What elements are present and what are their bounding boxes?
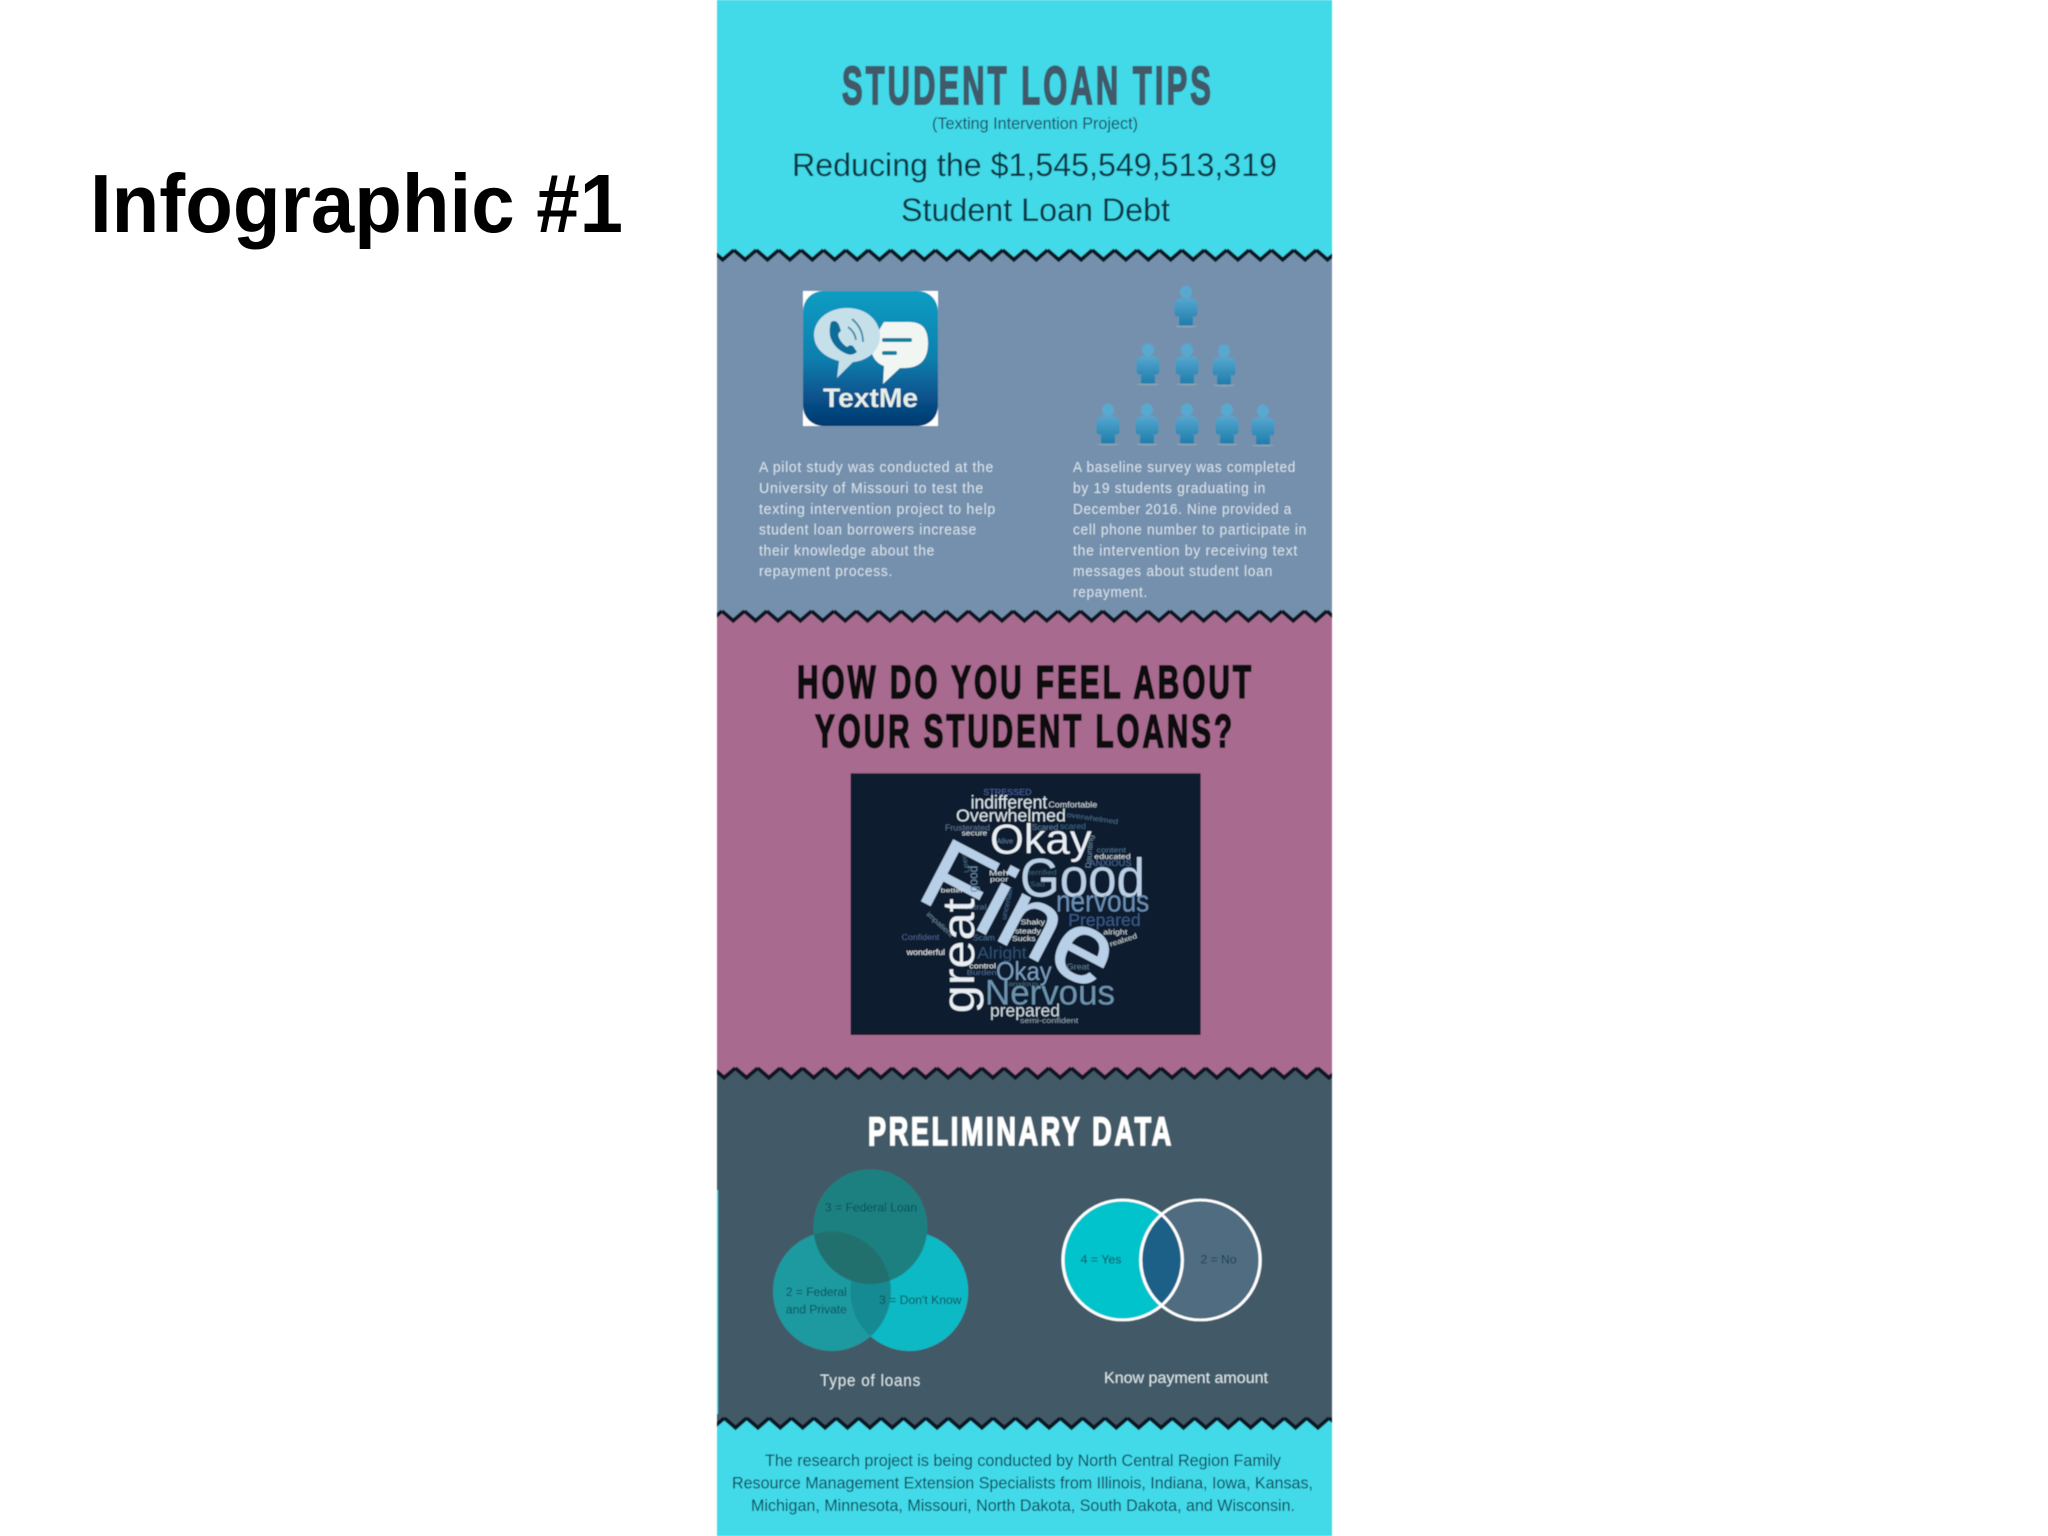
word cloud: Alright [977,943,1027,962]
word cloud: better [941,887,964,894]
word cloud: Daunting [1084,835,1096,868]
text: pilot study description: texting intervention project to help [759,501,996,518]
word cloud: poor [990,877,1009,884]
panel: title header [717,0,1332,252]
word cloud: overwhelmed [1066,810,1119,826]
text: baseline survey description: December 2016. Nine provided a [1073,501,1292,518]
word cloud: secure [962,829,987,838]
subtitle: Texting Intervention Project: (Texting Intervention Project) [932,114,1138,133]
text: baseline survey description: the intervention by receiving text [1073,542,1298,560]
venn labels [1081,1252,1237,1266]
headline: debt amount [792,147,1277,228]
text: pilot study description: their knowledge about the [759,542,935,560]
word cloud [851,773,1201,1035]
text: research project note: Resource Management Extension Specialists from Illinois, Indiana, Iowa, Kansas, [732,1474,1313,1492]
text: research project note [732,1452,1313,1515]
text: baseline survey description: repayment. [1073,584,1148,601]
chart: type of loans venn diagram [773,1169,968,1351]
word cloud: content [1097,845,1126,854]
text: baseline survey description: A baseline survey was completed [1073,459,1296,476]
word cloud: ANXIOUS [1089,859,1132,868]
venn labels: and Private [786,1302,847,1316]
word cloud: Frusterated [945,823,990,832]
slide heading: Infographic #1: Infographic #1 [90,157,623,250]
heading: How do you feel: HOW DO YOU FEEL ABOUT [797,656,1254,708]
word cloud: STRESSED [983,788,1032,797]
word cloud: Alive [997,836,1013,845]
headline: debt amount: Student Loan Debt [901,192,1170,228]
venn labels: 2 = Federal [786,1285,847,1299]
text: pilot study description: repayment process. [759,563,893,580]
word cloud: Nervous [985,973,1115,1012]
icon: group of people [1096,286,1274,446]
word cloud: Okay [990,815,1092,862]
word cloud: great [933,898,984,1013]
word cloud: uncertain [999,886,1015,920]
heading: Preliminary Data: PRELIMINARY DATA [868,1110,1174,1154]
word cloud: Overwhelmed [956,806,1066,826]
text: pilot study description: A pilot study was conducted at the [759,459,994,476]
word cloud: control [969,961,996,970]
text: pilot study description: University of Missouri to test the [759,480,984,497]
text: baseline survey description [1073,459,1307,601]
word cloud: Shaky [1021,917,1045,926]
word cloud: realxed [1108,931,1138,949]
word cloud: Leery [959,850,971,874]
word cloud: indifferent [971,791,1048,812]
icon: TextMe app: TextMe [823,383,918,413]
venn labels: 3 = Don't Know [879,1293,962,1307]
word cloud: Prepared [1068,910,1141,930]
panel: preliminary data [717,1070,1332,1422]
word cloud: prepared [990,1001,1060,1021]
word cloud: steady [1015,927,1041,936]
title: Student Loan Tips: STUDENT LOAN TIPS [842,56,1214,116]
label: type of loans: Type of loans [820,1371,921,1390]
infographic poster [717,0,1332,1536]
word cloud: educated [1094,852,1131,861]
venn labels [786,1201,962,1316]
word cloud: Meh [989,869,1008,878]
word cloud: Sucks [1012,934,1036,943]
word cloud: Fine [904,817,1137,1011]
label: know payment amount: Know payment amount [1104,1370,1269,1387]
word cloud: Okay [996,956,1052,986]
word cloud: nervous [1056,885,1149,919]
headline: debt amount: Reducing the $1,545,549,513,319 [792,147,1277,183]
venn labels: 2 = No [1200,1252,1237,1266]
venn labels: 3 = Federal Loan [825,1201,917,1214]
word cloud: alright [1103,927,1127,936]
word cloud: Burden [967,968,997,977]
text: research project note: Michigan, Minnesota, Missouri, North Dakota, South Dakota, and Wisconsin. [751,1497,1295,1515]
word cloud: Comfortable [1048,800,1098,809]
venn labels: 4 = Yes [1081,1252,1122,1266]
word cloud: semi-confident [1020,1016,1078,1025]
text: research project note: The research project is being conducted by North Central Region Family [765,1452,1282,1470]
word cloud: good [965,866,980,892]
word cloud: scared [1060,822,1086,831]
icon: TextMe app [803,291,938,426]
panel: feelings about student loans [717,614,1332,1070]
word cloud: wonderful [906,948,945,957]
text: pilot study description: student loan borrowers increase [759,522,977,538]
word cloud: Great [1067,963,1090,972]
word cloud: neutral [958,902,987,911]
panel: pilot study [717,252,1332,614]
heading: How do you feel: YOUR STUDENT LOANS? [815,705,1235,757]
text: baseline survey description: by 19 students graduating in [1073,480,1266,497]
word cloud: terrified [1028,868,1057,877]
word cloud: Sad [1030,880,1045,889]
word cloud: anxious [1008,981,1039,988]
text: baseline survey description: cell phone number to participate in [1073,522,1307,538]
heading: How do you feel [797,656,1254,757]
word cloud: Scam [973,934,995,943]
word cloud: Confident [902,933,940,942]
text: baseline survey description: messages about student loan [1073,563,1273,580]
text: pilot study description [759,459,996,580]
word cloud: Good [1020,847,1145,909]
chart: know payment amount venn diagram [1063,1200,1260,1320]
word cloud: Scared [1032,823,1058,832]
panel: footer research note [717,1422,1332,1536]
word cloud: impatient [925,910,955,939]
